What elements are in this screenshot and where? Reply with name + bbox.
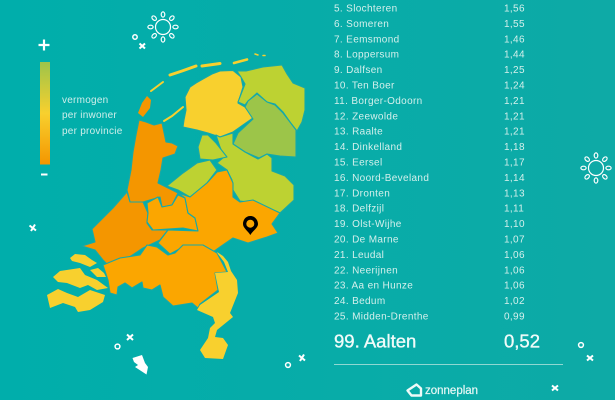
ranking table: 1,06 [504,250,525,261]
ranking table: 1,56 [504,4,525,14]
ranking table: 1,10 [504,219,525,230]
highlighted row: Aalten [334,330,540,352]
ranking table: 18. Delfzijl [334,204,384,215]
ranking table: 11. Borger-Odoorn [334,96,423,107]
ranking table: 6. Someren [334,19,389,30]
province: Limburg [197,252,238,359]
legend label [62,95,123,137]
province: Flevoland south [167,160,217,197]
ranking table: 1,14 [504,173,525,184]
ranking table: 1,18 [504,142,525,153]
map of the Netherlands [47,54,305,359]
province: Zuid-Holland [82,192,168,264]
ranking table: 7. Eemsmond [334,34,400,45]
logo: zonneplan: zonneplan [425,385,478,397]
ranking table: 1,44 [504,50,525,61]
icon: lightning bolt [132,355,148,374]
ranking table: 25. Midden-Drenthe [334,312,429,322]
legend minus sign [41,174,48,176]
highlighted row: Aalten: 99. Aalten [334,330,416,352]
province: Overijssel [216,133,294,213]
ranking table: 1,25 [504,65,525,76]
legend [38,40,123,176]
ranking table: 1,21 [504,96,525,107]
icon: location pin Aalten [243,216,258,235]
ranking table: 1,06 [504,281,525,292]
ranking table: 1,02 [504,296,525,307]
legend label: per provincie [62,126,123,137]
ranking table: 1,24 [504,80,525,92]
province: Utrecht [147,195,198,231]
ranking table: 15. Eersel [334,158,383,168]
province: Groningen [237,65,305,131]
ranking table: 1,21 [504,127,525,138]
legend plus sign [38,40,50,50]
icon: sun right [581,153,611,183]
province: Noord-Brabant [103,245,227,308]
legend label: vermogen [62,95,108,106]
ranking table: 13. Raalte [334,127,383,138]
province: Zeeland [47,254,108,312]
Wadden islands [138,54,265,121]
province: Noord-Holland [127,120,178,207]
ranking table: 1,17 [504,158,525,168]
ranking table: 12. Zeewolde [334,111,398,122]
ranking table: 20. De Marne [334,234,399,246]
ranking table: 1,46 [504,34,525,45]
ranking table: 1,11 [504,204,524,215]
legend label: per inwoner [62,110,117,121]
legend gradient bar [40,62,50,164]
ranking table: 1,21 [504,111,525,122]
icon: sun top [148,12,178,42]
ranking table [334,4,525,322]
ranking table: 14. Dinkelland [334,142,402,153]
ranking table: 16. Noord-Beveland [334,173,429,184]
province: Gelderland [158,170,280,254]
ranking table: 22. Neerijnen [334,265,398,276]
ranking table: 9. Dalfsen [334,65,383,76]
ranking table: 19. Olst-Wijhe [334,219,402,230]
province: Friesland [183,70,253,137]
icon: logo house [408,384,421,396]
province: Flevoland north [198,135,227,160]
ranking table: 1,06 [504,265,525,276]
ranking table: 1,07 [504,234,525,246]
ranking table: 10. Ten Boer [334,80,395,92]
ranking table: 23. Aa en Hunze [334,281,413,292]
ranking table: 24. Bedum [334,296,386,307]
province: Drenthe [233,94,296,158]
highlighted row: Aalten: 0,52 [504,330,540,352]
ranking table: 21. Leudal [334,250,384,261]
ranking table: 1,55 [504,19,525,30]
ranking table: 8. Loppersum [334,50,399,61]
divider line [334,364,563,365]
ranking table: 17. Dronten [334,188,390,199]
ranking table: 5. Slochteren [334,4,397,14]
ranking table: 0,99 [504,312,525,322]
ranking table: 1,13 [504,188,525,199]
